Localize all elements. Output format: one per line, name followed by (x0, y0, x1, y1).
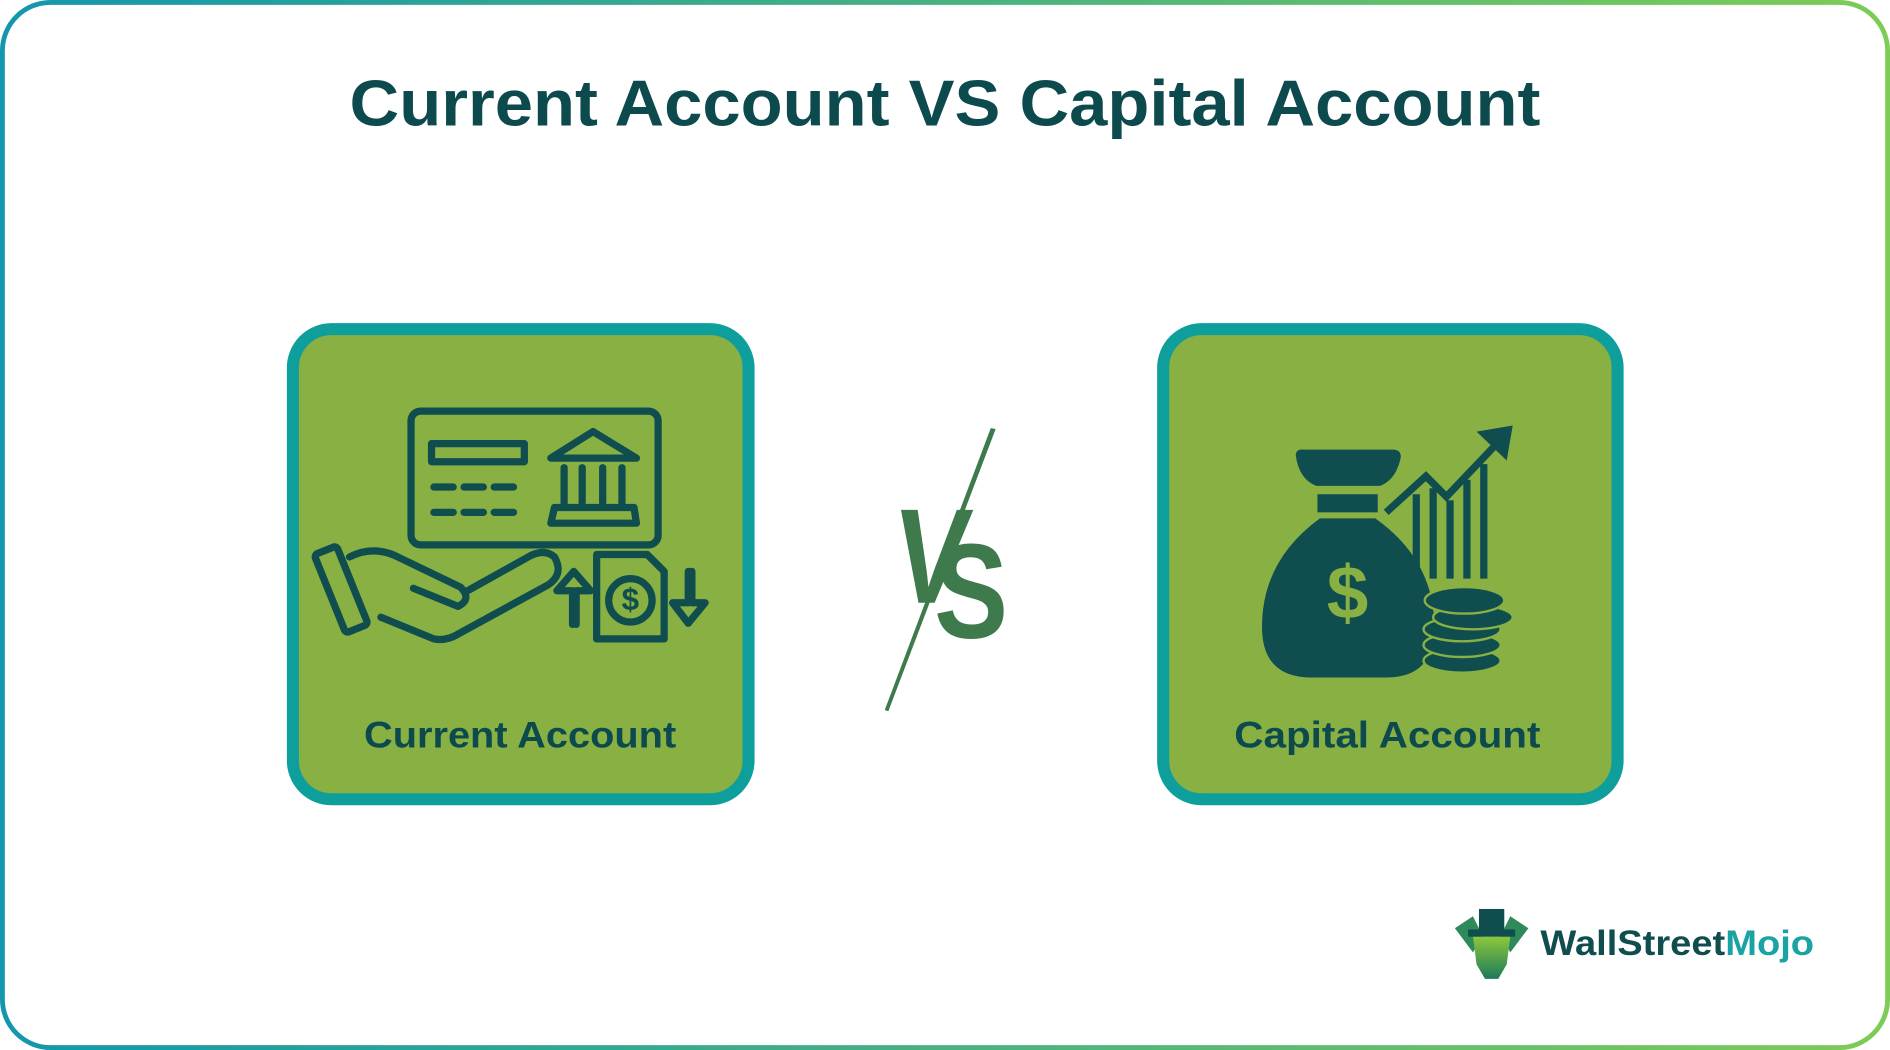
logo text: WallStreet Mojo (1540, 924, 1814, 963)
label: current account: Current Account (364, 713, 676, 755)
title: Current Account VS Capital Account (350, 66, 1540, 139)
vs mark: S (934, 516, 1008, 667)
panel: capital account (1163, 329, 1618, 799)
panel: current account (293, 329, 749, 799)
label: capital account: Capital Account (1234, 713, 1540, 755)
vs mark (885, 428, 1008, 711)
panel: current account: $ (622, 582, 639, 617)
vs mark: V (886, 482, 977, 632)
icon: money bag with chart and coins (1262, 426, 1513, 677)
icon: bull (1455, 909, 1528, 979)
icon: card with bank and hand (314, 411, 705, 640)
panel: capital account: $ (1327, 550, 1368, 634)
logo (1455, 909, 1814, 979)
